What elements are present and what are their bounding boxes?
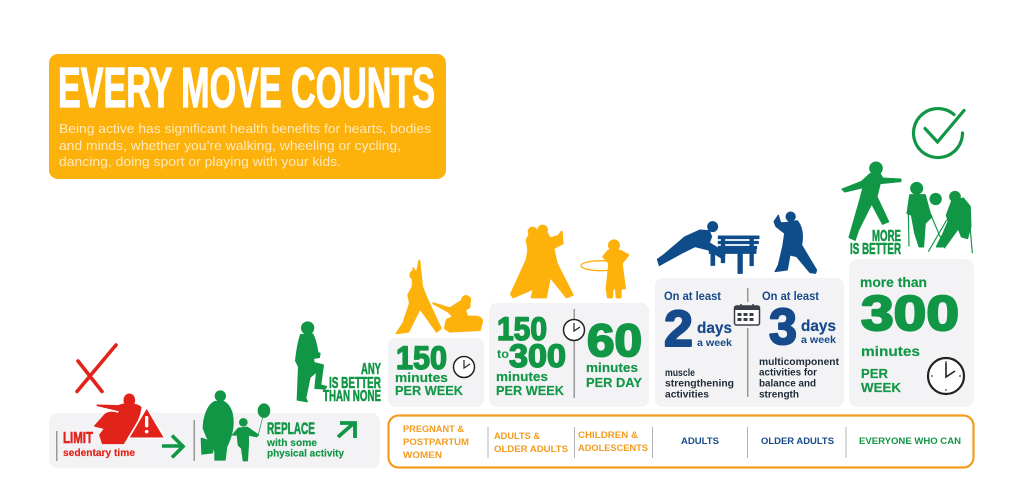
- value: 300: 300: [861, 287, 959, 341]
- icon: dancers and hula hoop girl: [511, 226, 628, 297]
- adults days per week: a week: [697, 337, 732, 349]
- value: 150: 150: [396, 340, 447, 376]
- label: pregnant and postpartum women: POSTPARTUM: [403, 437, 469, 447]
- panel: adults and older adults strength: [655, 278, 844, 407]
- multicomponent activities text: strength: [759, 390, 799, 400]
- muscle strengthening text: muscle: [665, 368, 695, 379]
- intro text: [59, 122, 431, 169]
- intro text: and minds, whether you’re walking, wheeling or cycling,: [59, 139, 401, 153]
- label: pregnant and postpartum women: WOMEN: [403, 450, 442, 460]
- heading: any is better than none: ANY: [361, 361, 381, 378]
- adults days per week: On at least: [664, 291, 721, 303]
- legend: population groups: [388, 416, 974, 468]
- icon: red cross: [77, 345, 116, 392]
- heading: any is better than none: IS BETTER: [329, 375, 381, 392]
- older adults days per week: [762, 291, 836, 355]
- label: children and adolescents: ADOLESCENTS: [578, 443, 648, 453]
- replace description: [266, 438, 344, 460]
- intro text: dancing, doing sport or playing with your kids.: [59, 155, 341, 169]
- panel: pregnant and postpartum women: [388, 338, 484, 407]
- heading: more is better: MORE: [872, 228, 901, 245]
- icon: woman with shopping bag and child with balloon: [201, 391, 270, 461]
- unit: minutes per week: minutes: [496, 370, 548, 384]
- icon: person stepping up: [296, 322, 327, 402]
- arrow: up and to the right: [338, 423, 355, 438]
- label: adults and older adults: ADULTS &: [494, 431, 540, 441]
- icon: seated person with warning triangle: [95, 394, 165, 443]
- icon: clock: [454, 356, 474, 378]
- unit: minutes: minutes: [861, 343, 920, 359]
- heading: more is better: IS BETTER: [850, 241, 901, 258]
- intro text: Being active has significant health benefits for hearts, bodies: [59, 122, 431, 136]
- label: adults: ADULTS: [681, 436, 719, 446]
- value: 60: 60: [587, 315, 642, 366]
- value: 150 to 300: 300: [509, 338, 566, 374]
- multicomponent activities text: multicomponent: [759, 357, 840, 368]
- icon: push-up on bench and tai chi figure: [657, 212, 817, 273]
- value: 150 to 300: to: [497, 347, 509, 361]
- unit: minutes per day: minutes: [586, 361, 638, 375]
- label: children and adolescents: CHILDREN &: [578, 430, 639, 440]
- label: older adults: OLDER ADULTS: [761, 436, 834, 446]
- adults days per week: 2: [664, 300, 693, 357]
- more than label: more than: [860, 275, 927, 290]
- older adults days per week: 3: [769, 298, 797, 355]
- label: adults and older adults: OLDER ADULTS: [494, 444, 568, 454]
- unit: minutes per week: PER WEEK: [395, 384, 463, 398]
- unit: minutes per week: PER WEEK: [496, 384, 564, 398]
- unit: minutes per week: minutes: [395, 371, 448, 385]
- multicomponent activities text: activities for: [759, 368, 817, 378]
- label: children and adolescents: [578, 430, 648, 453]
- label: everyone who can: EVERYONE WHO CAN: [859, 436, 961, 446]
- multicomponent activities text: [759, 357, 840, 400]
- panel: adults, older adults, children and adolescents: [489, 303, 649, 407]
- panel: everyone who can: [849, 259, 974, 407]
- replace description: with some: [266, 438, 317, 449]
- value: 150 to 300: 150: [497, 311, 547, 347]
- icon: check mark in circle: [914, 109, 964, 158]
- heading: more is better: [850, 228, 901, 258]
- replace label: REPLACE: [267, 419, 315, 438]
- panel: limit and replace: [49, 413, 380, 468]
- label: adults and older adults: [494, 431, 568, 454]
- icon: yoga figures: [397, 261, 482, 333]
- unit: minutes per week: [395, 371, 463, 398]
- title: EVERY MOVE COUNTS: [58, 56, 435, 120]
- icon: calendar: [733, 302, 761, 328]
- unit: per week: WEEK: [861, 381, 901, 395]
- unit: minutes per day: PER DAY: [586, 376, 643, 390]
- unit: per week: PER: [861, 367, 888, 381]
- arrow: limit to replace: [162, 436, 184, 458]
- older adults days per week: a week: [801, 334, 836, 346]
- unit: minutes per week: [496, 370, 564, 398]
- label: pregnant and postpartum women: PREGNANT &: [403, 424, 464, 434]
- muscle strengthening text: activities: [665, 390, 709, 400]
- icon: clock: [564, 320, 584, 340]
- heading: any is better than none: THAN NONE: [323, 388, 381, 405]
- label: pregnant and postpartum women: [403, 424, 469, 460]
- panel: title banner: [49, 54, 446, 179]
- adults days per week: days: [697, 320, 732, 337]
- sedentary time label: sedentary time: [63, 448, 135, 459]
- older adults days per week: On at least: [762, 291, 819, 303]
- muscle strengthening text: strengthening: [665, 378, 734, 390]
- unit: per week: [861, 367, 901, 395]
- replace description: physical activity: [267, 448, 344, 460]
- icon: clock: [928, 358, 964, 394]
- icon: figures playing sport: [842, 162, 972, 253]
- muscle strengthening text: [665, 368, 734, 400]
- value: 150 to 300: [497, 311, 566, 374]
- unit: minutes per day: [586, 361, 643, 390]
- multicomponent activities text: balance and: [759, 378, 816, 390]
- adults days per week: [664, 291, 732, 357]
- heading: any is better than none: [323, 361, 381, 405]
- limit label: LIMIT: [63, 430, 93, 447]
- older adults days per week: days: [801, 318, 836, 335]
